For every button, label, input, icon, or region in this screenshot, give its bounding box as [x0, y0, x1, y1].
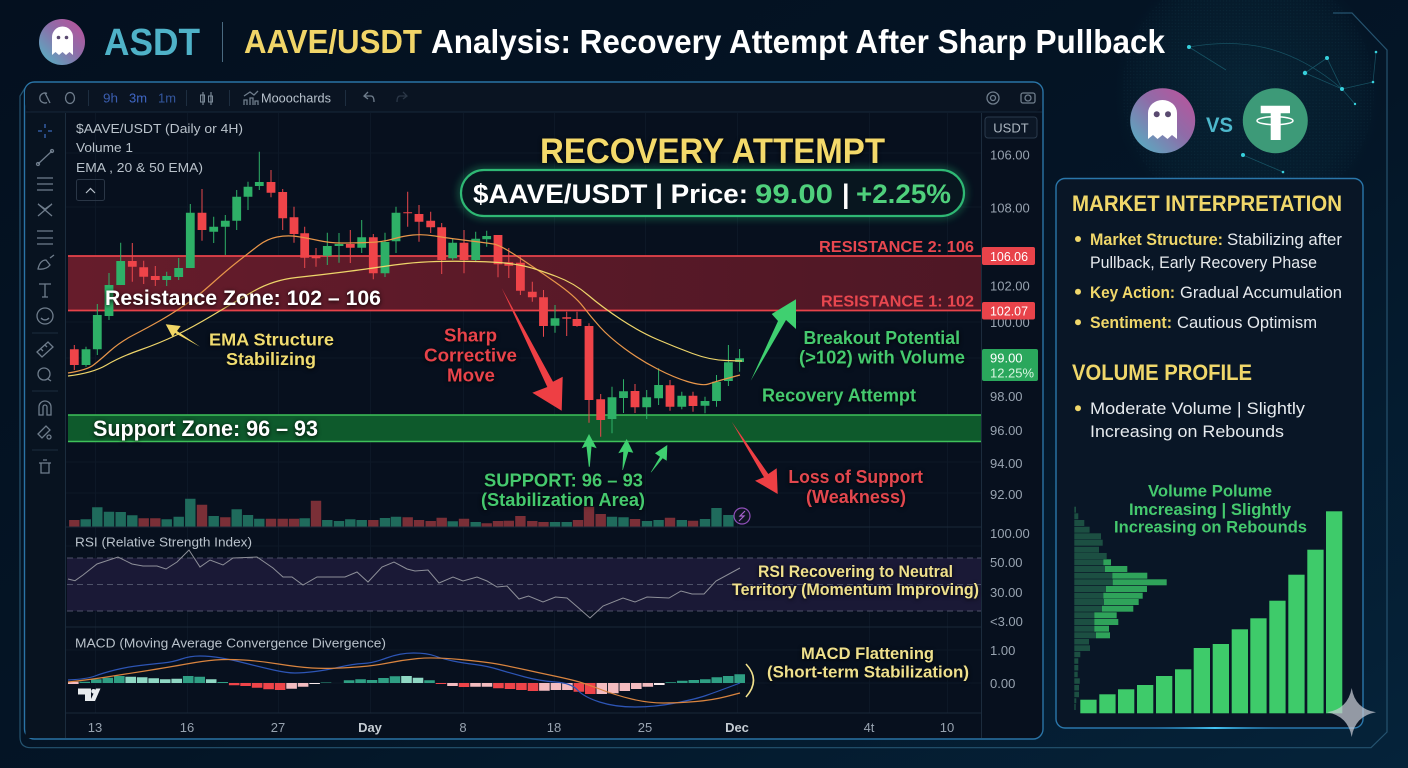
- label: volume chart: Volume Polume: [1148, 482, 1272, 500]
- label: sharp corrective move: Sharp: [444, 326, 497, 346]
- label: resistance levels: RESISTANCE 2: 106: [819, 239, 974, 256]
- x axis labels: 13: [88, 720, 102, 735]
- top toolbar: Mooochards: [261, 92, 331, 106]
- heading: recovery attempt: RECOVERY ATTEMPT: [540, 132, 885, 171]
- x axis labels: 25: [638, 720, 652, 735]
- price axis: 92.00: [990, 487, 1023, 502]
- globe backdrop: [1114, 0, 1382, 226]
- vs label: VS: [1206, 114, 1233, 137]
- MACD histogram: [73, 674, 740, 694]
- top toolbar: 1m: [158, 90, 176, 106]
- label: EMA structure: [209, 330, 334, 369]
- icon: TV logo: [78, 688, 100, 701]
- pane separators: [66, 527, 982, 713]
- left toolbar: [26, 113, 66, 738]
- label: volume chart: Increasing on Rebounds: [1114, 518, 1307, 536]
- price axis: 30.00: [990, 585, 1023, 600]
- x axis labels: [88, 720, 954, 735]
- label: volume chart: Imcreasing | Slightly: [1129, 500, 1292, 519]
- price axis: 94.00: [990, 456, 1023, 471]
- label: resistance levels: RESISTANCE 1: 102: [821, 294, 974, 311]
- bullet: key action: Gradual Accumulation: [1180, 284, 1342, 302]
- heading: market interpretation: MARKET INTERPRETATION: [1072, 191, 1342, 216]
- price tag: 99.00: 12.25%: [990, 366, 1034, 380]
- label: support zone: Support Zone: 96 – 93: [93, 416, 318, 441]
- RSI pane: [67, 534, 982, 618]
- label: loss of support: Loss of Support: [788, 467, 923, 487]
- price axis: 108.00: [990, 200, 1030, 216]
- bullet: volume: [1075, 400, 1306, 441]
- chart: horizontal volume profile: [1074, 507, 1167, 710]
- price axis: 102.00: [990, 278, 1030, 294]
- price axis: 100.00: [990, 315, 1030, 330]
- label: RSI note: [732, 563, 979, 599]
- label: support stabilization: (Stabilization Area): [481, 490, 645, 510]
- price axis: 50.00: [990, 555, 1023, 570]
- price axis: USDT: [993, 120, 1029, 136]
- label: resistance zone: Resistance Zone: 102 – 106: [105, 287, 381, 310]
- icon: sparkle: [1327, 688, 1376, 737]
- bullet: key action: Key Action:: [1090, 284, 1175, 302]
- label: resistance levels: [819, 239, 974, 311]
- price axis: 100.00: [990, 526, 1030, 541]
- bullet: volume: Increasing on Rebounds: [1090, 423, 1284, 441]
- MACD pane: [68, 636, 740, 707]
- arrow: sharp move: [502, 288, 563, 411]
- label: sharp corrective move: [424, 326, 517, 386]
- icon: MACD bracket: [746, 664, 754, 697]
- icon: tether token: [1243, 88, 1308, 153]
- resistance zone: [68, 256, 982, 310]
- label: support stabilization: SUPPORT: 96 – 93: [484, 471, 643, 491]
- bullet: sentiment: Cautious Optimism: [1177, 314, 1317, 332]
- price capsule: $AAVE/USDT | Price:: [473, 179, 748, 209]
- price axis: 106.00: [990, 148, 1030, 162]
- label: sharp corrective move: Move: [447, 366, 495, 386]
- price capsule: 99.00: [755, 179, 833, 209]
- panel: chart: [24, 82, 1043, 739]
- label: sharp corrective move: Corrective: [424, 346, 517, 366]
- header logo: [39, 19, 85, 65]
- chart legend: Volume 1: [76, 140, 133, 155]
- header divider: [222, 22, 223, 62]
- x axis labels: Dec: [725, 720, 749, 735]
- arrow: breakout: [751, 299, 796, 381]
- bullet: market structure: Stabilizing after: [1227, 231, 1343, 249]
- label: MACD note: MACD Flattening: [801, 645, 934, 663]
- token comparison: [1130, 88, 1308, 153]
- x axis labels: 10: [940, 720, 954, 735]
- x axis labels: 27: [271, 720, 285, 735]
- icon: lightning badge: [734, 508, 750, 524]
- chart legend: [76, 121, 243, 200]
- chart legend: $AAVE/USDT (Daily or 4H): [76, 121, 243, 136]
- label: EMA structure: EMA Structure: [209, 330, 334, 350]
- price axis: 98.00: [990, 389, 1023, 404]
- label: RSI note: RSI Recovering to Neutral: [758, 563, 953, 581]
- heading: volume profile: VOLUME PROFILE: [1072, 360, 1252, 385]
- grid lines: [66, 113, 982, 713]
- x axis labels: 18: [547, 720, 561, 735]
- chart legend: EMA , 20 & 50 EMA): [76, 160, 203, 175]
- price tag: 99.00: 99.00: [990, 350, 1023, 366]
- brand name: ASDT: [104, 22, 200, 64]
- price tag: 102.07: 102.07: [990, 304, 1028, 318]
- x axis labels: 4t: [864, 720, 875, 735]
- top toolbar: [25, 83, 1042, 112]
- label: breakout potential: Breakout Potential: [804, 328, 960, 348]
- label: loss of support: [788, 467, 923, 507]
- bullet: market structure: Market Structure:: [1090, 231, 1223, 249]
- label: EMA structure: Stabilizing: [226, 349, 316, 369]
- price axis: [981, 113, 1038, 738]
- price axis: 96.00: [990, 423, 1023, 438]
- label: MACD note: (Short-term Stabilization): [767, 664, 969, 682]
- support zone: [68, 415, 982, 442]
- label: MACD note: [767, 645, 969, 682]
- price tag: 106.06: [982, 247, 1035, 265]
- label: recovery attempt: Recovery Attempt: [762, 386, 916, 406]
- price tag: 106.06: 106.06: [990, 249, 1028, 264]
- price capsule: +2.25%: [856, 179, 951, 209]
- x axis labels: 16: [180, 720, 194, 735]
- panel: market interpretation: [1056, 178, 1363, 729]
- x axis labels: 8: [459, 720, 467, 735]
- bullet: key action: [1075, 284, 1342, 302]
- label: breakout potential: (>102) with Volume: [799, 347, 965, 367]
- EMA lines: [68, 235, 742, 385]
- bullet: volume: Moderate Volume | Slightly: [1090, 400, 1306, 418]
- price capsule: |: [842, 179, 850, 209]
- price axis: <3.00: [990, 614, 1023, 629]
- price tag: 102.07: [982, 302, 1035, 320]
- x axis labels: Day: [358, 720, 383, 735]
- price capsule: [461, 170, 964, 216]
- arrows: support bounce: [582, 434, 667, 472]
- chart: growing volume bars: [1080, 511, 1342, 713]
- top toolbar: 9h: [103, 90, 118, 106]
- candlesticks: [74, 152, 740, 437]
- label: support stabilization: [481, 471, 645, 510]
- bullet: market structure: [1075, 231, 1343, 272]
- label: loss of support: (Weakness): [806, 487, 906, 507]
- icon: ghost token: [1130, 88, 1195, 153]
- label: breakout potential: [799, 328, 965, 367]
- price tag: 99.00: [982, 349, 1038, 381]
- price axis: 0.00: [990, 676, 1015, 691]
- volume bars: [74, 499, 728, 526]
- arrow: EMA: [166, 324, 200, 347]
- arrow: loss of support: [732, 422, 778, 494]
- top toolbar: 3m: [129, 90, 147, 106]
- RSI pane: RSI (Relative Strength Index): [75, 534, 252, 550]
- label: volume chart: [1114, 482, 1307, 536]
- price axis: 1.00: [990, 643, 1015, 658]
- MACD pane: MACD (Moving Average Convergence Divergence): [75, 636, 386, 650]
- bullet: market structure: Pullback, Early Recovery Phase: [1090, 254, 1317, 272]
- label: RSI note: Territory (Momentum Improving): [732, 581, 979, 599]
- bullet: sentiment: [1075, 314, 1317, 332]
- bullet: sentiment: Sentiment:: [1090, 314, 1172, 332]
- title: AAVE/USDT: [244, 23, 422, 60]
- title: Analysis: Recovery Attempt After Sharp Pullback: [431, 23, 1166, 60]
